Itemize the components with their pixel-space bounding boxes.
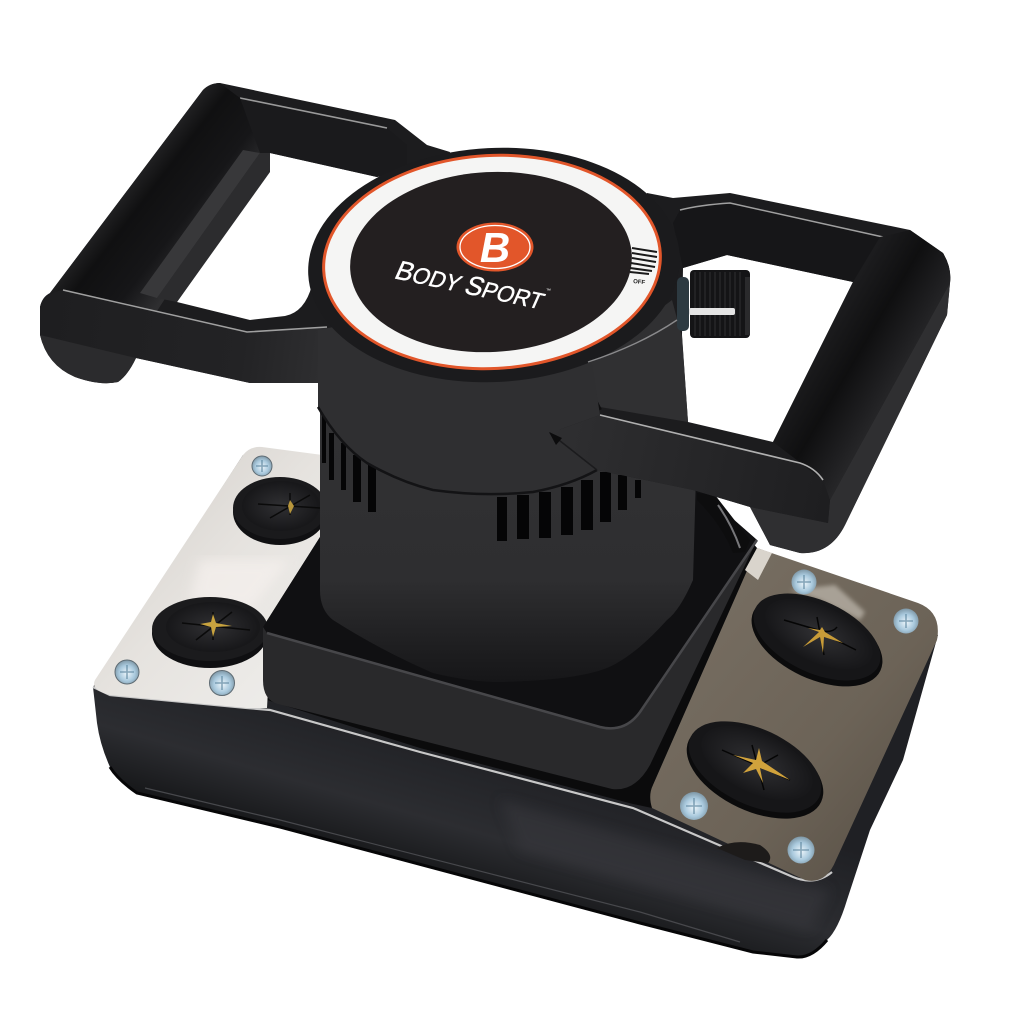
- left steel plate: [94, 447, 330, 708]
- collar under dial: [318, 310, 600, 494]
- screws: [115, 456, 918, 864]
- pad: lower right: [672, 703, 838, 838]
- disc rim: [302, 138, 686, 392]
- dial disc: [302, 138, 686, 392]
- right bronze plate: [650, 548, 938, 881]
- logo badge: B: [480, 224, 510, 271]
- rubber underside: [750, 283, 950, 553]
- side latch: [697, 493, 750, 553]
- grip inner strip: [140, 150, 260, 298]
- pad: upper left: [233, 477, 327, 545]
- pad: upper right: [737, 576, 897, 705]
- left handle: [40, 83, 450, 383]
- front bar: [550, 415, 830, 523]
- brand name: BODY SPORT: [391, 255, 550, 315]
- orange ring: [317, 145, 667, 379]
- pad: lower left: [152, 597, 268, 668]
- white ring: [320, 148, 664, 376]
- trademark: ™: [546, 288, 551, 294]
- grip rubber strip: [157, 153, 270, 302]
- knob: [677, 270, 750, 338]
- rim highlight: [588, 320, 677, 362]
- top bar recess: [240, 98, 407, 177]
- motor cylinder: [320, 390, 697, 682]
- logo badge: [456, 222, 534, 272]
- top bar recess: [673, 203, 883, 282]
- vents: left: [322, 413, 376, 512]
- hub behind handle: [583, 300, 688, 422]
- front bar: [40, 290, 330, 383]
- base trim strip: [93, 687, 832, 881]
- grip: [50, 83, 260, 311]
- base cushion: [93, 455, 938, 957]
- black face: [345, 165, 637, 359]
- right handle: [550, 193, 950, 553]
- square mount: [263, 490, 757, 789]
- rubber lip: [40, 335, 136, 383]
- off ticks: [630, 248, 657, 274]
- grip: [773, 230, 950, 500]
- dark gap under mount: [267, 480, 757, 808]
- off label: OFF: [633, 279, 646, 286]
- vents: right: [497, 472, 641, 541]
